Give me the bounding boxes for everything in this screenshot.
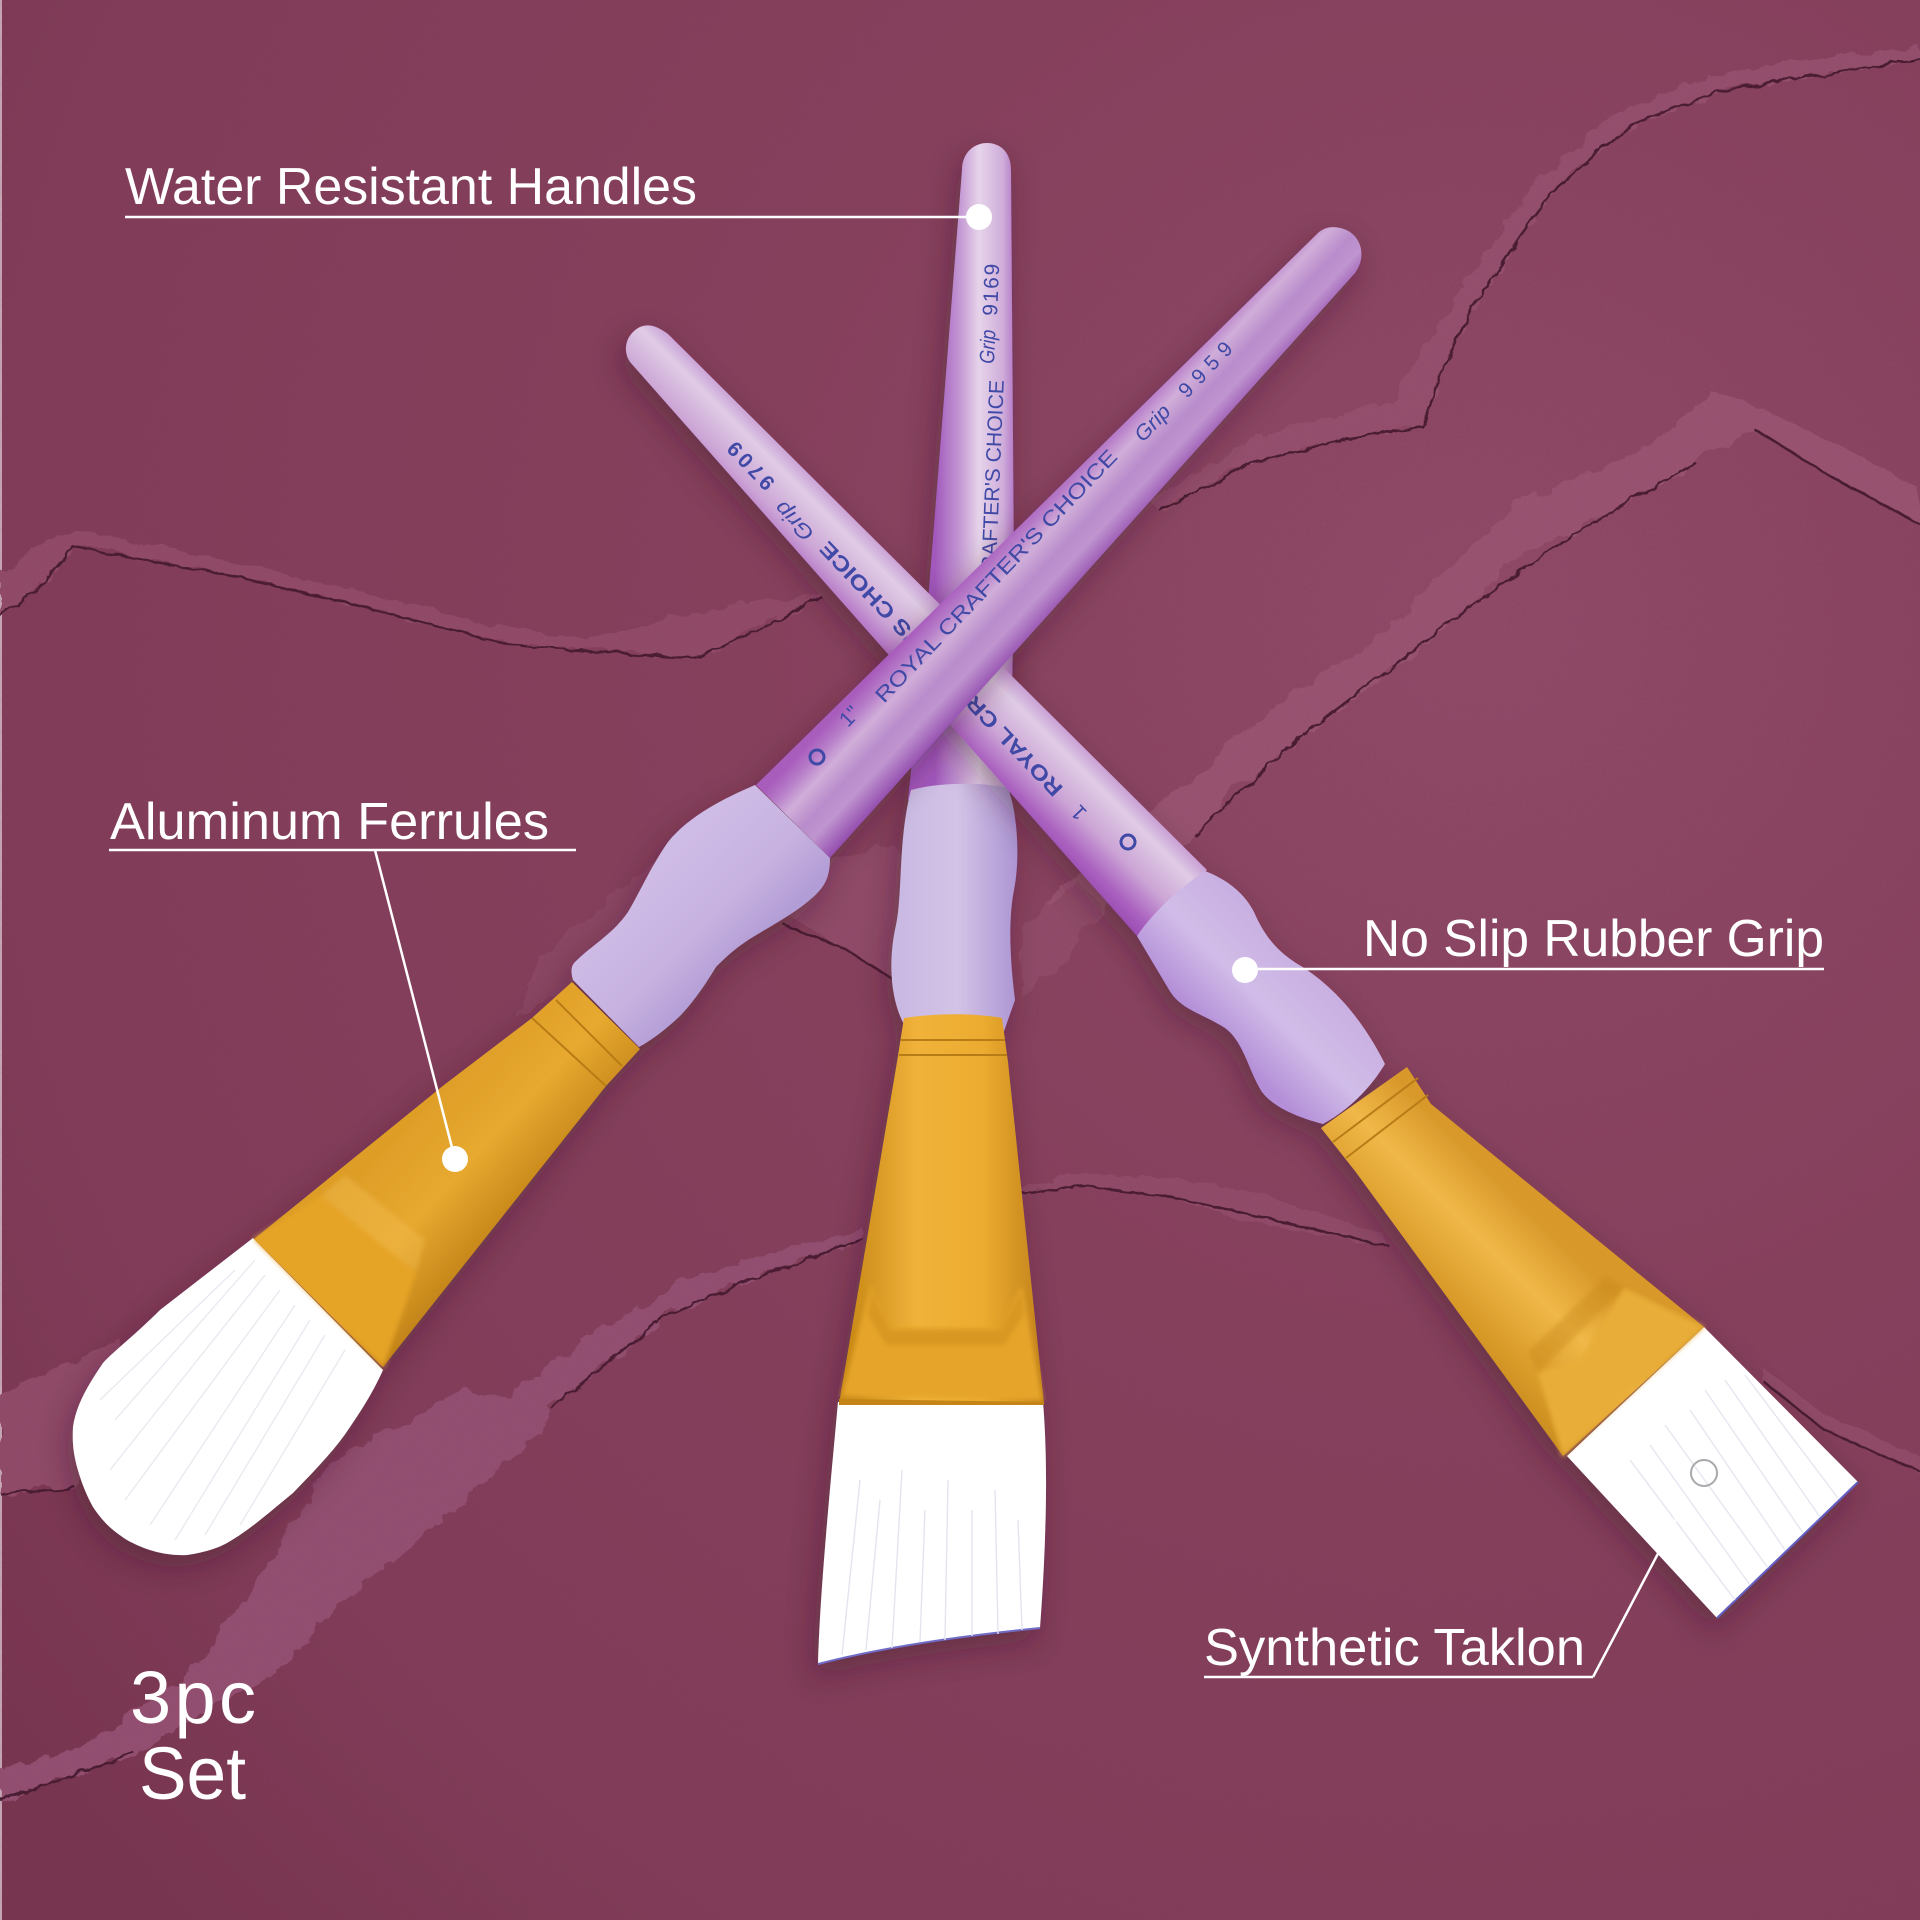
label: Water Resistant Handles [125, 158, 992, 230]
right handle print: ROYAL CRAFTER'S CHOICE [816, 536, 1068, 800]
left bristles [73, 1238, 383, 1555]
right handle print: 9709 [723, 436, 780, 494]
center handle print: 9169 [979, 263, 1004, 316]
center handle print: ROYAL CRAFTER'S CHOICE [974, 379, 1009, 662]
left handle print: 1" [835, 702, 865, 731]
label: Synthetic Taklon [1204, 1460, 1717, 1677]
left grip [572, 785, 830, 1047]
left handle print: 9959 [1174, 337, 1238, 402]
brush: right [626, 325, 1858, 1618]
right handle [626, 325, 1207, 936]
right handle print [723, 436, 1135, 849]
right grip [1137, 871, 1385, 1124]
brush: center [818, 143, 1046, 1664]
label: Aluminum Ferrules: Aluminum Ferrules [110, 793, 549, 851]
center bristles [818, 1402, 1046, 1664]
label: Water Resistant Handles: Water Resistant Handles [125, 158, 697, 216]
right handle print: Grip [770, 496, 819, 545]
brush: left [73, 227, 1361, 1555]
left handle print: ROYAL CRAFTER'S CHOICE [871, 445, 1122, 707]
set count [130, 1656, 256, 1815]
label: No Slip Rubber Grip [1232, 910, 1824, 983]
set count: Set [139, 1732, 246, 1815]
label: No Slip Rubber Grip: No Slip Rubber Grip [1363, 910, 1824, 968]
left handle print: Grip [1130, 400, 1176, 446]
label: Aluminum Ferrules [109, 793, 576, 1172]
right ferrule [1321, 1067, 1704, 1456]
left ferrule [254, 982, 640, 1367]
left handle [756, 227, 1361, 858]
right bristles [1567, 1327, 1858, 1618]
left handle print [810, 337, 1238, 764]
center handle print [974, 263, 1009, 662]
center handle print: Grip [976, 329, 1000, 364]
label: Synthetic Taklon: Synthetic Taklon [1204, 1619, 1585, 1677]
center grip [891, 784, 1017, 1034]
center ferrule [839, 1014, 1044, 1405]
right handle print: 1 [1067, 800, 1092, 824]
set count: 3pc [130, 1656, 256, 1739]
center handle [908, 143, 1014, 800]
